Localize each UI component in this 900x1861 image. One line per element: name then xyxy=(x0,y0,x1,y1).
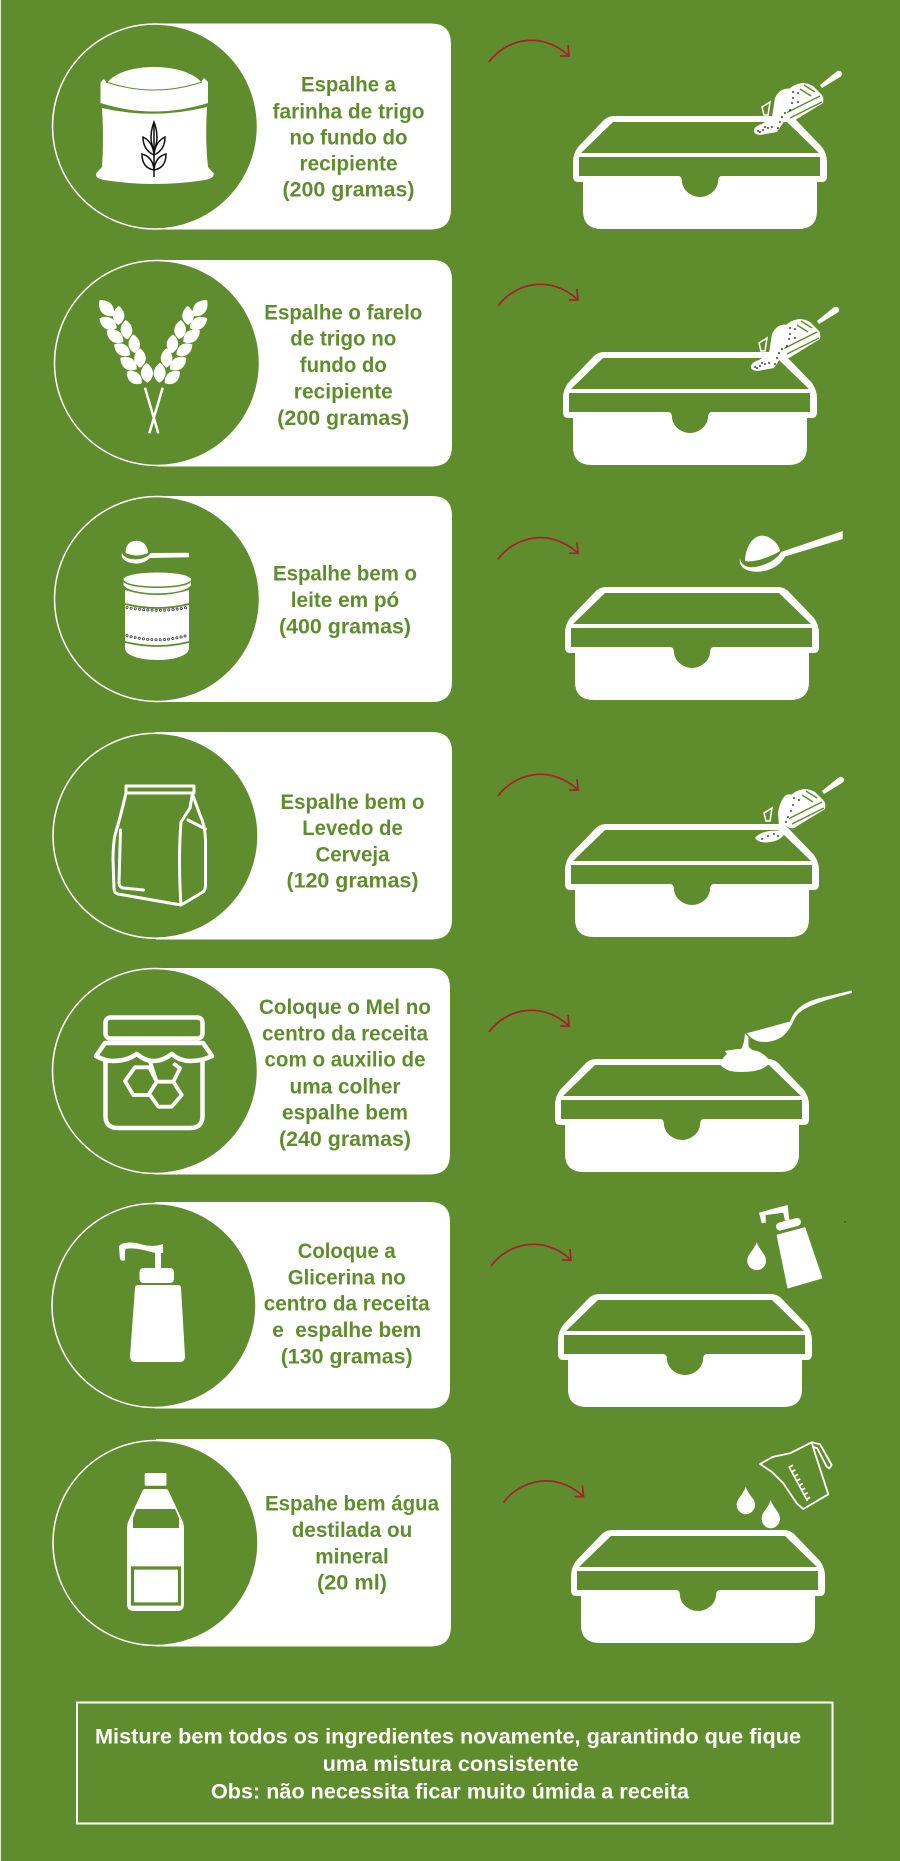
text: step 2 xyxy=(264,300,422,430)
panel: step 4 card xyxy=(53,732,452,940)
text: step 1 xyxy=(272,73,424,202)
icon: spoon pouring honey xyxy=(720,990,852,1072)
text: step 7 xyxy=(265,1492,440,1595)
arrow xyxy=(498,538,578,559)
text: step 4 xyxy=(280,790,424,892)
text: step 6: (130 gramas) xyxy=(281,1344,413,1368)
step 5: honey xyxy=(52,968,852,1174)
tub xyxy=(571,1530,825,1643)
text: step 1: no fundo do xyxy=(290,125,408,149)
tub xyxy=(555,1059,809,1172)
tub with scoop xyxy=(573,71,842,229)
text: step 3 xyxy=(273,561,417,638)
icon: bag xyxy=(113,786,206,905)
arrow xyxy=(489,1010,569,1032)
text: step 4: (120 gramas) xyxy=(286,868,418,892)
text: step 2: Espalhe o farelo xyxy=(264,300,422,324)
step 3: milk powder xyxy=(54,496,843,702)
arrow xyxy=(498,774,578,796)
text: step 7: mineral xyxy=(315,1544,389,1568)
text: step 4: Levedo de xyxy=(302,816,403,840)
icon: tilted pump bottle and drop xyxy=(747,1205,846,1287)
icon: spoon over tub xyxy=(740,531,843,572)
step 2: bran xyxy=(54,260,839,466)
text: step 4: Espalhe bem o xyxy=(280,790,424,814)
arrow xyxy=(491,1244,571,1266)
panel: step 3 card xyxy=(54,496,452,702)
tub xyxy=(558,1294,812,1407)
text: step 6: Coloque a xyxy=(298,1239,397,1263)
icon: spoon and can xyxy=(122,541,191,660)
text: step 1: Espalhe a xyxy=(301,73,397,97)
text: step 2: de trigo no xyxy=(290,327,396,351)
text: step 5: uma colher xyxy=(290,1074,401,1098)
text: step 7: Espahe bem água xyxy=(265,1492,440,1516)
icon: honey jar xyxy=(96,1018,212,1128)
arrow xyxy=(498,284,578,306)
icon: flour sack xyxy=(96,67,214,184)
text: step 6 xyxy=(264,1239,431,1368)
icon: wheat stalks xyxy=(95,296,212,433)
text: step 6: e espalhe bem xyxy=(272,1318,421,1342)
text: step 1: farinha de trigo xyxy=(272,99,424,123)
step 4: brewer's yeast xyxy=(53,732,844,940)
text: step 2: fundo do xyxy=(300,353,387,377)
tub xyxy=(565,587,819,700)
panel: step 6 card xyxy=(52,1202,450,1408)
panel: step 1 card xyxy=(52,24,451,230)
arrow xyxy=(504,1481,584,1503)
callout: final instructions xyxy=(77,1702,832,1824)
text: step 6: Glicerina no xyxy=(288,1265,406,1289)
text: step 5: com o auxilio de xyxy=(264,1048,426,1072)
text: step 3: (400 gramas) xyxy=(279,614,411,638)
callout: final instructions: Obs: não necessita ficar muito úmida a receita xyxy=(211,1780,690,1804)
text: step 2: (200 gramas) xyxy=(277,406,409,430)
step 7: water xyxy=(53,1439,832,1646)
callout: final instructions: uma mistura consistente xyxy=(323,1752,579,1776)
text: step 6: centro da receita xyxy=(264,1292,431,1316)
icon: water bottle xyxy=(127,1473,184,1611)
icon: measuring cup and drops xyxy=(737,1442,832,1528)
text: step 5: (240 gramas) xyxy=(279,1127,411,1151)
text: step 1: (200 gramas) xyxy=(282,178,414,202)
text: step 4: Cerveja xyxy=(316,842,390,866)
arrow xyxy=(489,40,569,62)
text: step 7: (20 ml) xyxy=(317,1571,387,1595)
panel: step 2 card xyxy=(54,260,452,466)
text: step 1: recipiente xyxy=(300,152,398,176)
text: step 5: Coloque o Mel no xyxy=(259,995,431,1019)
text: step 5: centro da receita xyxy=(262,1021,429,1045)
step 1: flour xyxy=(52,24,842,230)
text: step 5: espalhe bem xyxy=(282,1101,408,1125)
text: step 2: recipiente xyxy=(294,380,393,404)
text: step 3: Espalhe bem o xyxy=(273,561,417,585)
step 6: glycerin xyxy=(52,1202,846,1408)
panel: step 5 card xyxy=(52,968,450,1174)
tub with scoop xyxy=(563,307,839,465)
icon: pump bottle xyxy=(119,1243,185,1362)
panel: step 7 card xyxy=(53,1439,451,1646)
text: step 5 xyxy=(259,995,431,1151)
tub with scoop xyxy=(565,777,844,937)
text: step 3: leite em pó xyxy=(291,588,399,612)
callout: final instructions: Misture bem todos os ingredientes novamente, garantindo que fique xyxy=(95,1724,801,1748)
text: step 7: destilada ou xyxy=(292,1518,412,1542)
